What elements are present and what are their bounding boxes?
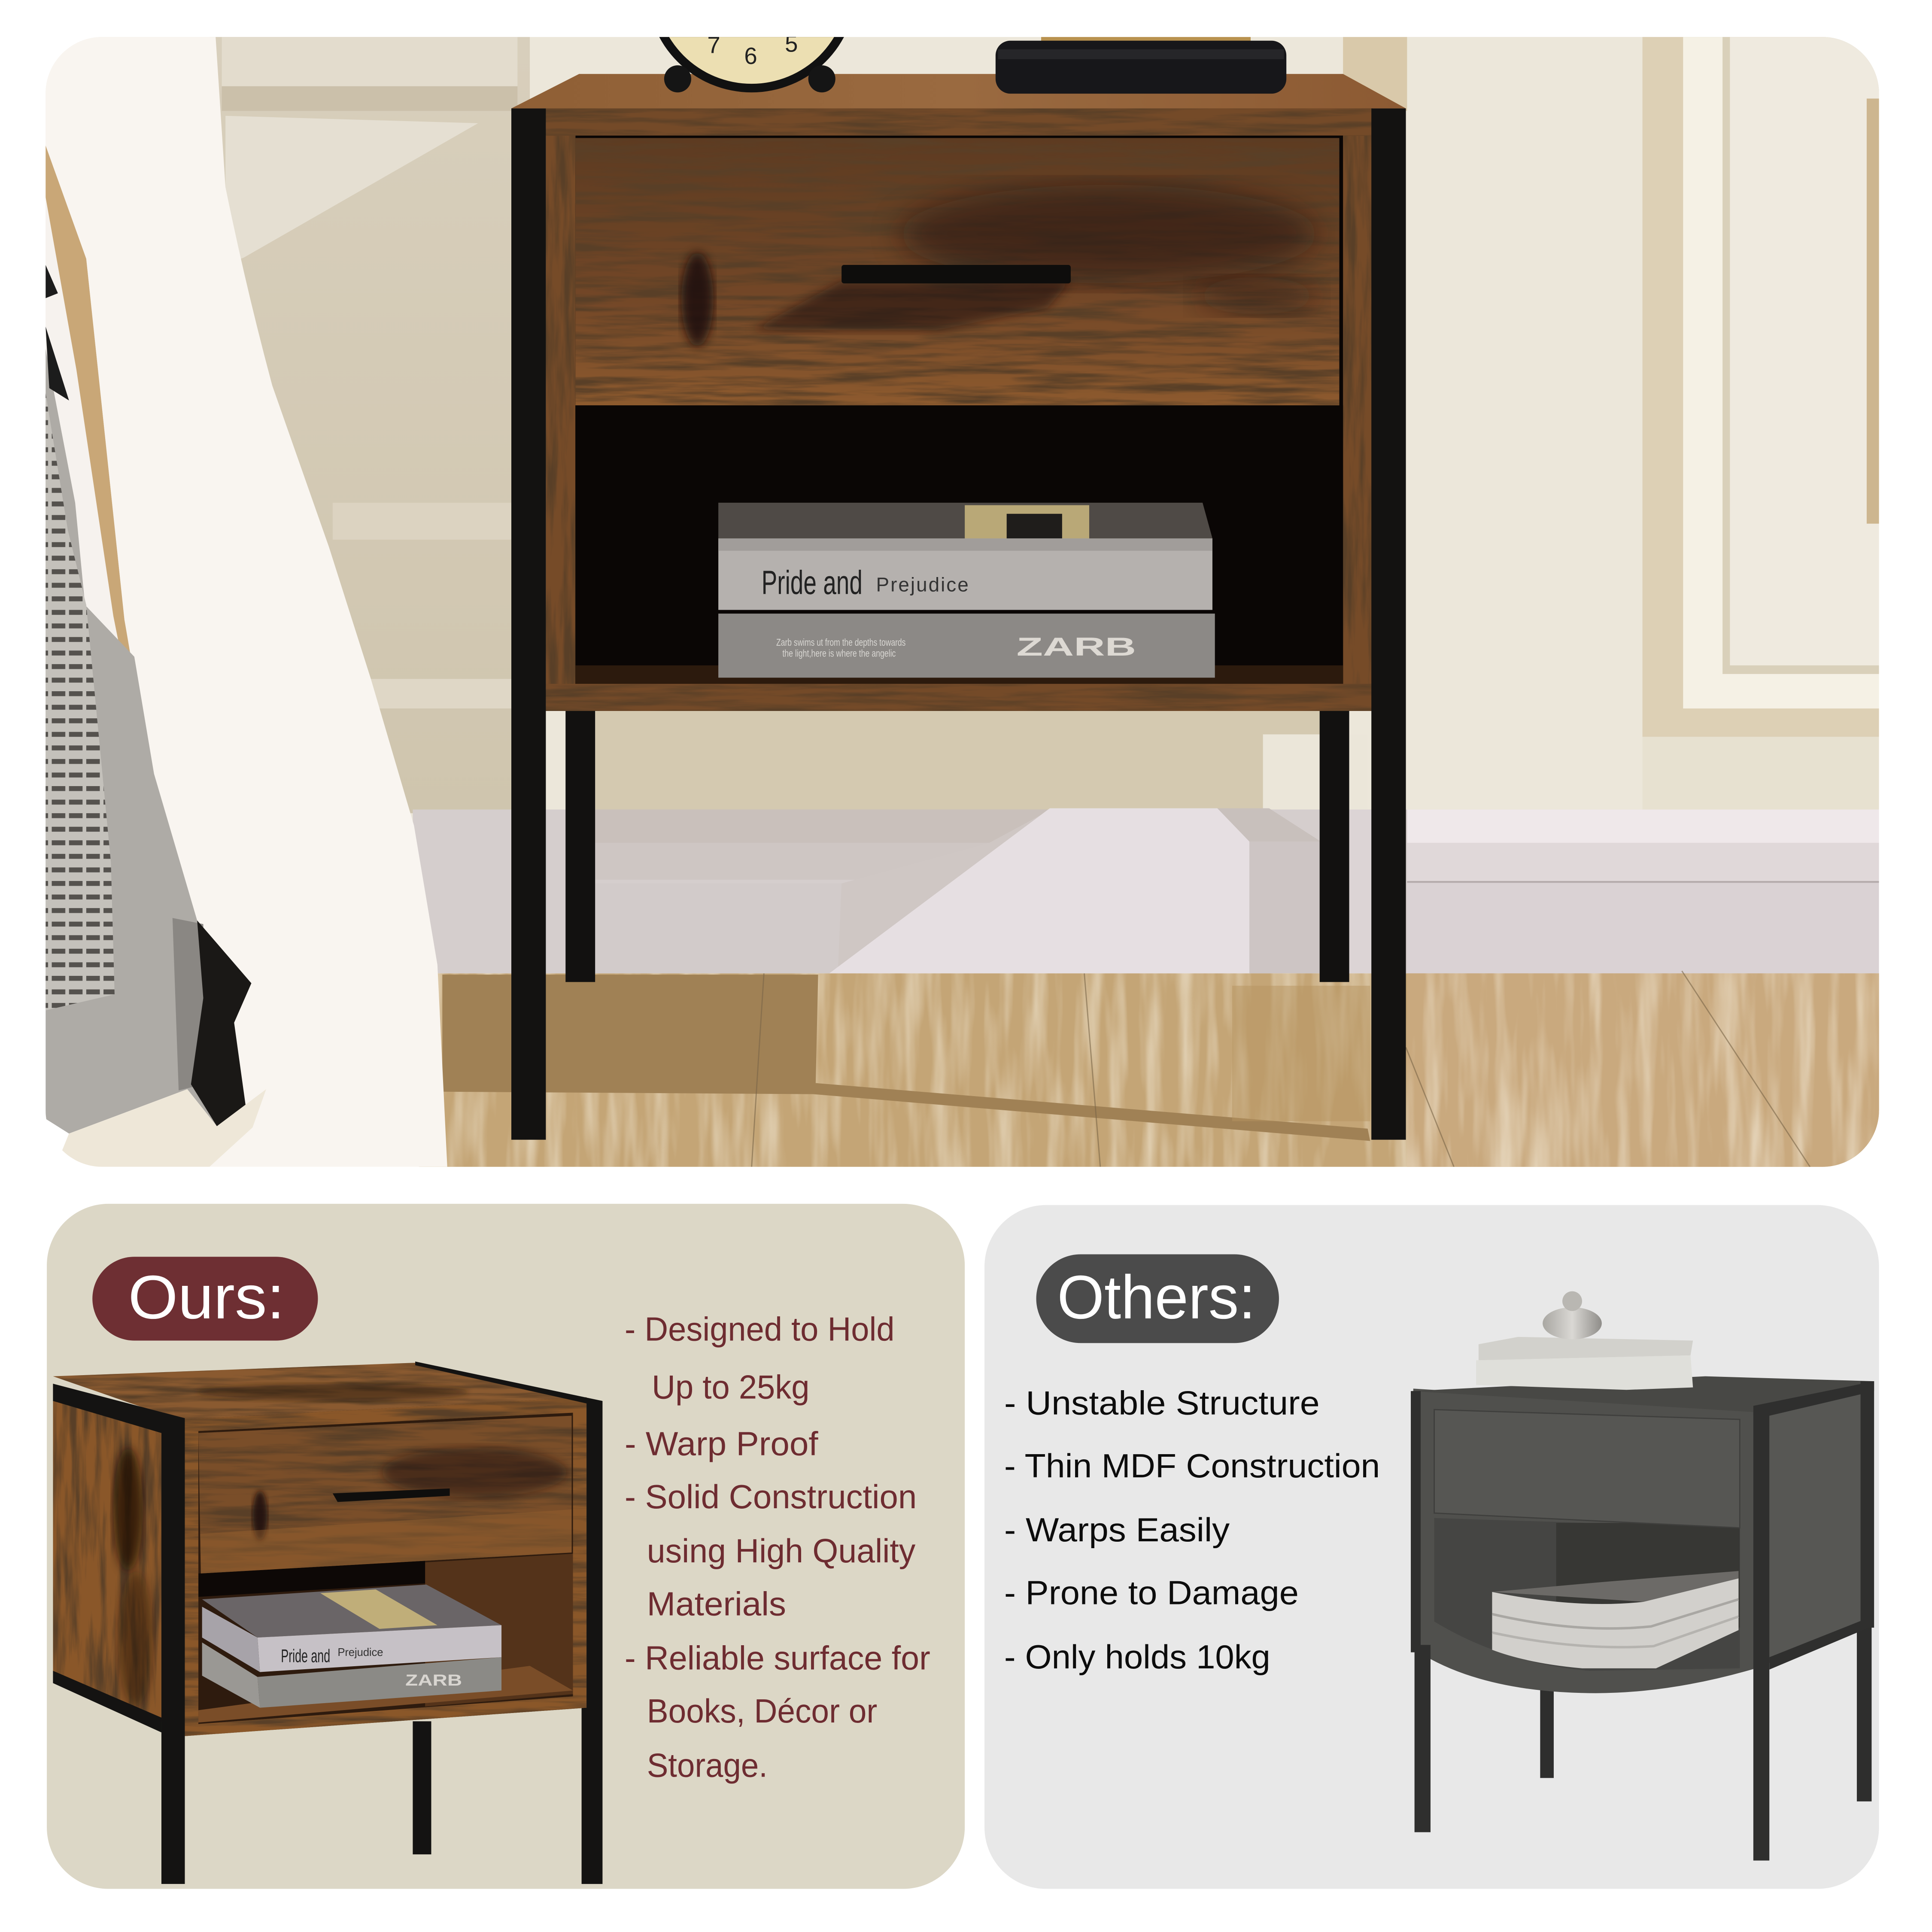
right wood post xyxy=(1343,136,1373,687)
feature list: ours: - Designed to Hold xyxy=(625,1311,895,1348)
alarm clock on nightstand: 5 xyxy=(785,31,798,57)
feature list: ours xyxy=(625,1311,930,1784)
drawer front with wood grain xyxy=(575,138,1340,405)
feature list: others: - Thin MDF Construction xyxy=(1004,1448,1380,1485)
badge: others: Others: xyxy=(1057,1263,1255,1332)
product: rustic wood nightstand xyxy=(53,1360,602,1884)
baseboard xyxy=(413,808,1879,973)
front black legs xyxy=(511,109,1406,1140)
white pillow behind xyxy=(46,37,160,863)
back legs xyxy=(1540,1614,1871,1801)
drawer handle xyxy=(841,265,1071,283)
feature list: others: - Prone to Damage xyxy=(1004,1575,1299,1612)
feature list: ours: - Reliable surface for xyxy=(625,1640,930,1677)
wall background xyxy=(46,37,1879,826)
drawer front xyxy=(198,1415,574,1575)
stack of books: Prejudice xyxy=(876,574,969,596)
badge: others xyxy=(1036,1255,1279,1343)
books on shelf xyxy=(202,1585,501,1708)
wall panel moulding frame xyxy=(1643,37,1879,811)
books on top xyxy=(1476,1337,1693,1390)
black metal frame xyxy=(1411,1381,1874,1861)
books on shelf: Prejudice xyxy=(337,1646,383,1659)
stack of books: ZARB xyxy=(1017,632,1136,661)
open shelf xyxy=(1434,1518,1740,1671)
wooden floor xyxy=(419,971,1888,1170)
curved body xyxy=(1413,1388,1756,1693)
feature list: ours: Up to 25kg xyxy=(652,1369,810,1406)
feature list: others: - Only holds 10kg xyxy=(1004,1639,1270,1676)
front wood frame xyxy=(185,1395,589,1738)
open shelf interior xyxy=(575,405,1343,687)
alarm clock on nightstand xyxy=(647,0,857,92)
drawer handle xyxy=(333,1488,450,1502)
panel: hero photo of nightstand in bedroom xyxy=(46,0,1888,1170)
stack of books: the light,here is where the angelic xyxy=(782,648,896,659)
left wood post xyxy=(546,136,575,687)
nightstand hero xyxy=(511,109,1406,1140)
badge: ours: Ours: xyxy=(128,1263,285,1332)
feature list: others: - Warps Easily xyxy=(1004,1512,1230,1549)
dark backing behind frame xyxy=(546,109,1373,711)
stacked magazines xyxy=(1492,1571,1738,1668)
tan shadow strip behind blanket xyxy=(46,146,164,833)
stack of books: Zarb swims ut from the depths towards xyxy=(776,637,905,648)
round black tray with gold object xyxy=(996,37,1286,94)
top surface xyxy=(1411,1376,1874,1412)
ornament xyxy=(1543,1291,1602,1340)
alarm clock on nightstand: 7 xyxy=(707,32,720,58)
nightstand top surface xyxy=(511,74,1406,109)
books on shelf: Pride and xyxy=(281,1646,330,1666)
grey woven throw with black fringe xyxy=(46,265,266,1167)
feature list: ours: Books, Décor or xyxy=(647,1693,877,1730)
bottom shelf rail xyxy=(546,684,1373,711)
feature list: ours: using High Quality xyxy=(647,1533,916,1570)
rear legs xyxy=(565,711,1349,982)
front top rail xyxy=(546,109,1373,136)
white bed blanket xyxy=(46,37,447,1167)
books on shelf: ZARB xyxy=(405,1671,462,1689)
product: grey competitor nightstand xyxy=(1411,1291,1874,1861)
black metal frame xyxy=(53,1361,602,1884)
alarm clock on nightstand: 6 xyxy=(744,43,757,69)
back leg and right leg xyxy=(413,1398,602,1884)
badge: ours xyxy=(92,1257,318,1340)
stack of books: Pride and xyxy=(762,564,863,601)
stack of books xyxy=(718,503,1215,677)
panel: ours xyxy=(47,1204,965,1889)
feature list: ours: - Solid Construction xyxy=(625,1479,917,1516)
feature list: ours: Materials xyxy=(647,1586,786,1622)
feature list: others: - Unstable Structure xyxy=(1004,1385,1320,1422)
front backing xyxy=(185,1397,586,1736)
feature list: others xyxy=(1004,1385,1380,1676)
drawer front xyxy=(1434,1410,1740,1528)
feature list: ours: Storage. xyxy=(647,1747,768,1784)
side panel xyxy=(53,1392,166,1725)
feature list: ours: - Warp Proof xyxy=(625,1425,818,1462)
side panel xyxy=(1762,1390,1863,1666)
panel: others xyxy=(984,1205,1879,1889)
top surface xyxy=(53,1360,589,1425)
shelf interior xyxy=(198,1554,573,1722)
